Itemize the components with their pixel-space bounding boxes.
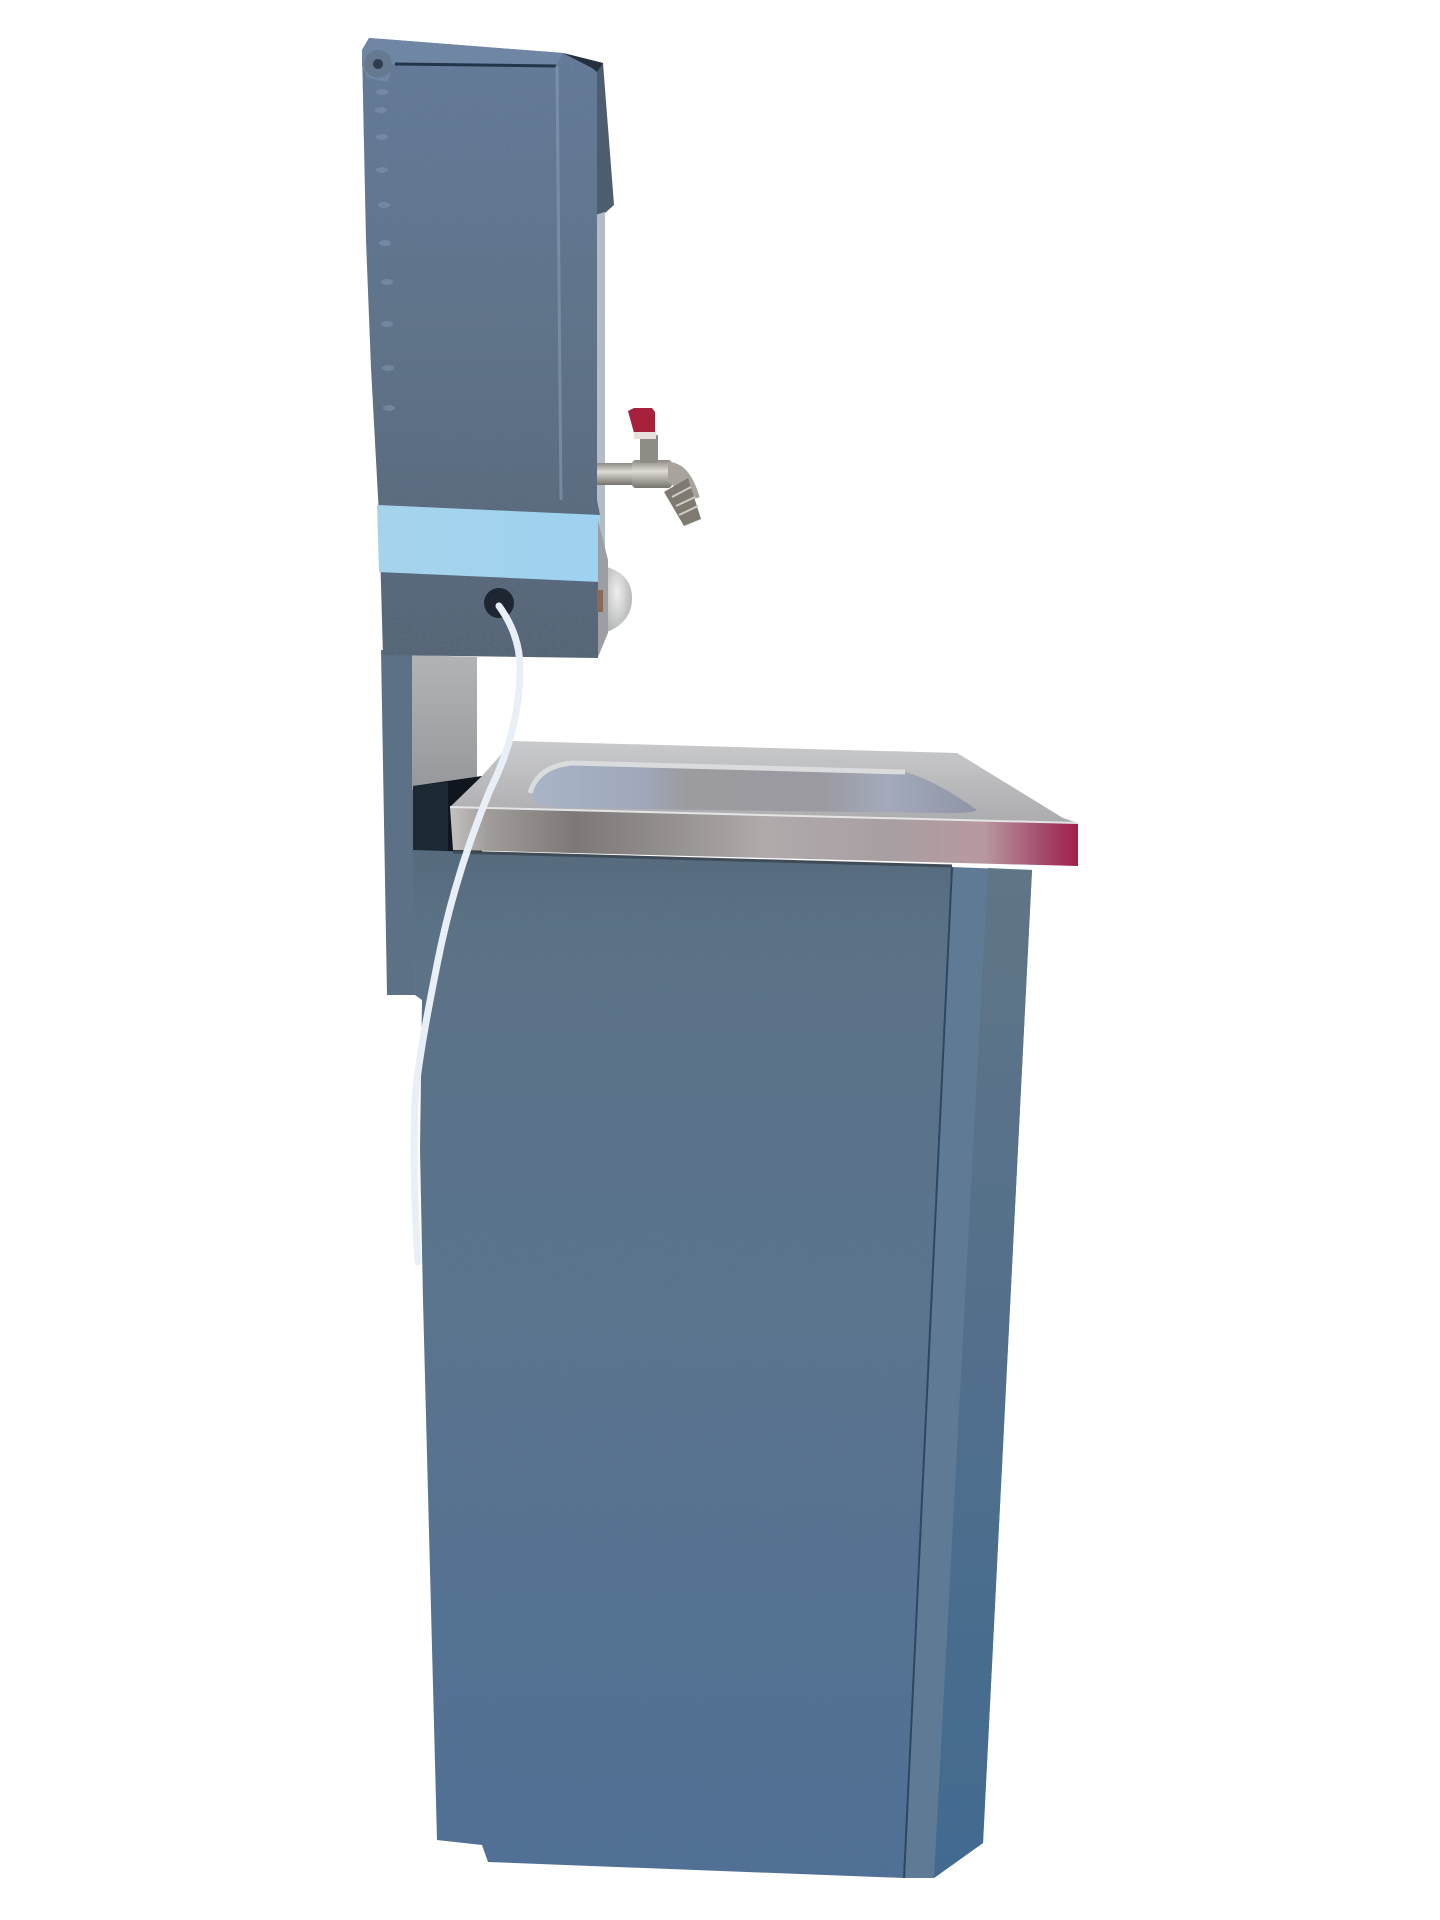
door seam: [904, 867, 952, 1878]
sensor dome: [597, 520, 632, 657]
box sloped roof: [563, 53, 614, 217]
faucet red handle: [628, 408, 655, 433]
cabinet side panel: [904, 867, 1032, 1878]
cable grommet: [484, 588, 514, 618]
rivet: [364, 50, 392, 78]
sink front rim: [450, 807, 1078, 866]
faucet body: [632, 460, 672, 488]
box top flap: [362, 38, 563, 82]
cabinet side shadow strip: [934, 868, 1032, 1878]
faucet: [597, 408, 701, 526]
faucet stem: [640, 435, 658, 463]
upper water heater box: [362, 38, 614, 658]
faucet nozzle: [668, 472, 690, 500]
box main face: [362, 38, 600, 658]
light blue reflective band: [377, 505, 600, 582]
box side seam: [557, 66, 561, 500]
hinge bumps: [375, 89, 395, 411]
dark bracket behind sink: [413, 776, 482, 852]
white power cable: [414, 606, 520, 1262]
sink deck: [450, 741, 1078, 823]
basin interior: [530, 763, 977, 813]
rear post: [381, 650, 477, 995]
faucet inlet pipe: [597, 463, 633, 485]
cabinet body: [413, 850, 1032, 1878]
box side light strip: [595, 212, 605, 560]
sink: [450, 741, 1078, 866]
cabinet front face: [413, 850, 952, 1878]
